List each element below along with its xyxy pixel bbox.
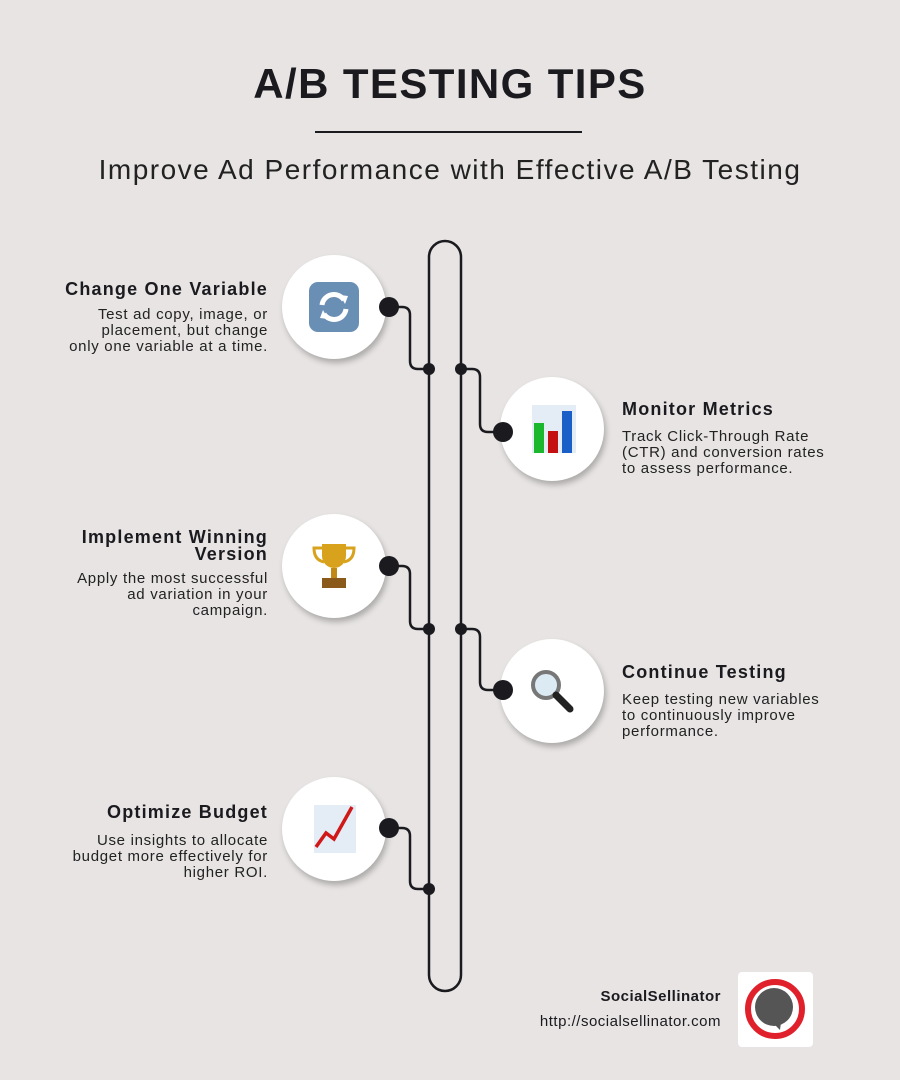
text: monitor metrics — [622, 399, 824, 477]
text: continue testing — [622, 662, 819, 740]
text: optimize budget: higher ROI. — [184, 864, 268, 881]
icon: magnifier — [500, 639, 604, 743]
icon: bar chart — [500, 377, 604, 481]
text: change one variable — [65, 279, 268, 355]
text: optimize budget: Optimize Budget — [107, 802, 268, 822]
text: continue testing: performance. — [622, 723, 719, 740]
title: A/B TESTING TIPS — [253, 60, 647, 107]
text: continue testing: Keep testing new variables — [622, 691, 819, 708]
text: implement winning version: Implement Winning — [82, 527, 268, 547]
icon: trend chart — [282, 777, 386, 881]
footer brand: http://socialsellinator.com — [540, 1013, 721, 1030]
text: optimize budget: budget more effectively for — [73, 848, 268, 865]
subtitle: Improve Ad Performance with Effective A/B Testing — [99, 154, 801, 185]
icon: refresh — [282, 255, 386, 359]
footer brand: SocialSellinator — [600, 988, 721, 1005]
text: implement winning version: campaign. — [192, 602, 268, 619]
text: continue testing: Continue Testing — [622, 662, 787, 682]
text: implement winning version: Version — [195, 544, 268, 564]
text: change one variable: Change One Variable — [65, 279, 268, 299]
text: implement winning version: Apply the most successful — [77, 570, 268, 587]
text: monitor metrics: (CTR) and conversion rates — [622, 444, 824, 461]
text: implement winning version — [77, 527, 268, 619]
text: optimize budget: Use insights to allocate — [97, 832, 268, 849]
footer brand — [540, 988, 721, 1030]
text: continue testing: to continuously improve — [622, 707, 796, 724]
text: monitor metrics: to assess performance. — [622, 460, 793, 477]
text: change one variable: placement, but change — [102, 322, 268, 339]
text: change one variable: Test ad copy, image, or — [98, 306, 268, 323]
text: implement winning version: ad variation in your — [127, 586, 268, 603]
text: optimize budget — [73, 802, 268, 881]
logo — [738, 972, 813, 1047]
icon: trophy — [282, 514, 386, 618]
text: change one variable: only one variable at a time. — [69, 338, 268, 355]
text: monitor metrics: Track Click-Through Rate — [622, 428, 809, 445]
text: monitor metrics: Monitor Metrics — [622, 399, 774, 419]
